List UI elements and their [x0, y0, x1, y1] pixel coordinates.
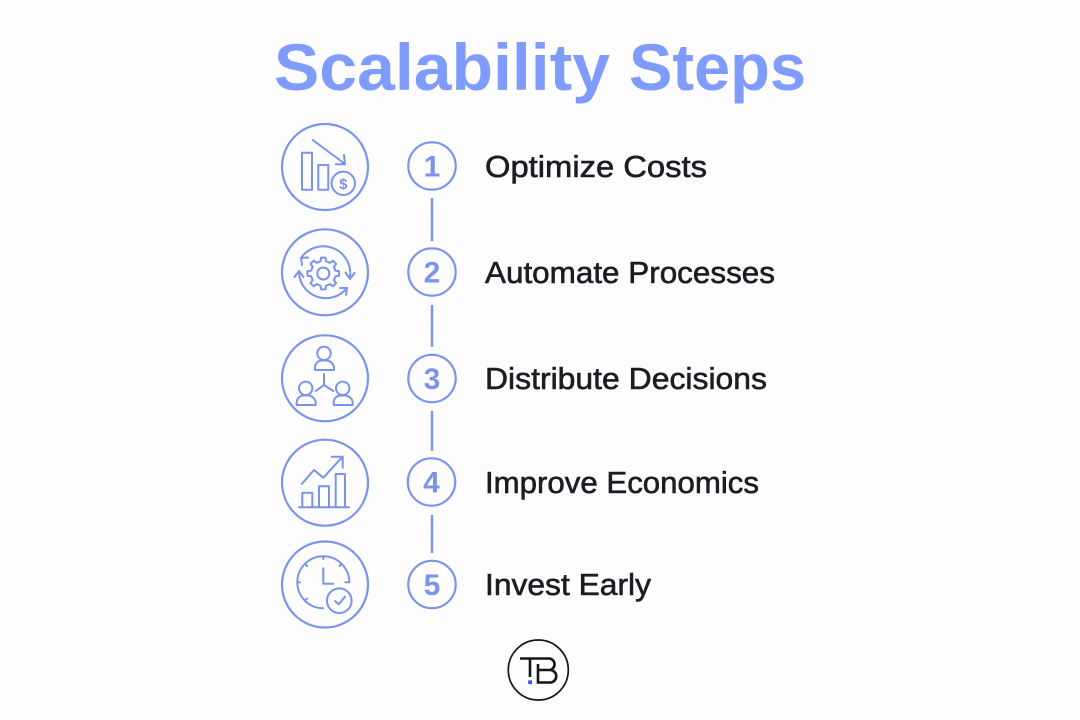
step 4 number: [408, 458, 455, 506]
step 2 number: [408, 248, 456, 296]
title: Scalability: [274, 30, 610, 104]
step 5 number: 5: [424, 569, 440, 602]
step 3 number: [408, 355, 456, 402]
step 5 number: [408, 561, 456, 608]
label: step 1: Optimize Costs: [485, 149, 707, 184]
label: step 3: Distribute Decisions: [485, 361, 767, 396]
connector 3-4: [431, 411, 433, 451]
icon: growth chart: [282, 440, 368, 526]
connector 4-5: [431, 515, 433, 553]
step 2 number: 2: [424, 256, 440, 290]
label: step 5: Invest Early: [485, 567, 652, 602]
step 4 number: 4: [423, 466, 440, 500]
step 1 number: 1: [424, 150, 440, 184]
icon: falling costs: $: [339, 176, 348, 193]
connector 1-2: [431, 198, 433, 241]
icon: falling costs: [282, 124, 368, 210]
step 3 number: 3: [424, 363, 440, 396]
label: step 4: Improve Economics: [485, 465, 759, 500]
title: Steps: [629, 30, 806, 104]
logo: TB: [508, 640, 568, 700]
icon: distributed team: [282, 335, 368, 421]
label: step 2: Automate Processes: [485, 255, 775, 290]
connector 2-3: [431, 305, 433, 347]
icon: automation gear: [282, 229, 368, 315]
step 1 number: [408, 142, 456, 190]
icon: clock with check: [282, 542, 368, 628]
